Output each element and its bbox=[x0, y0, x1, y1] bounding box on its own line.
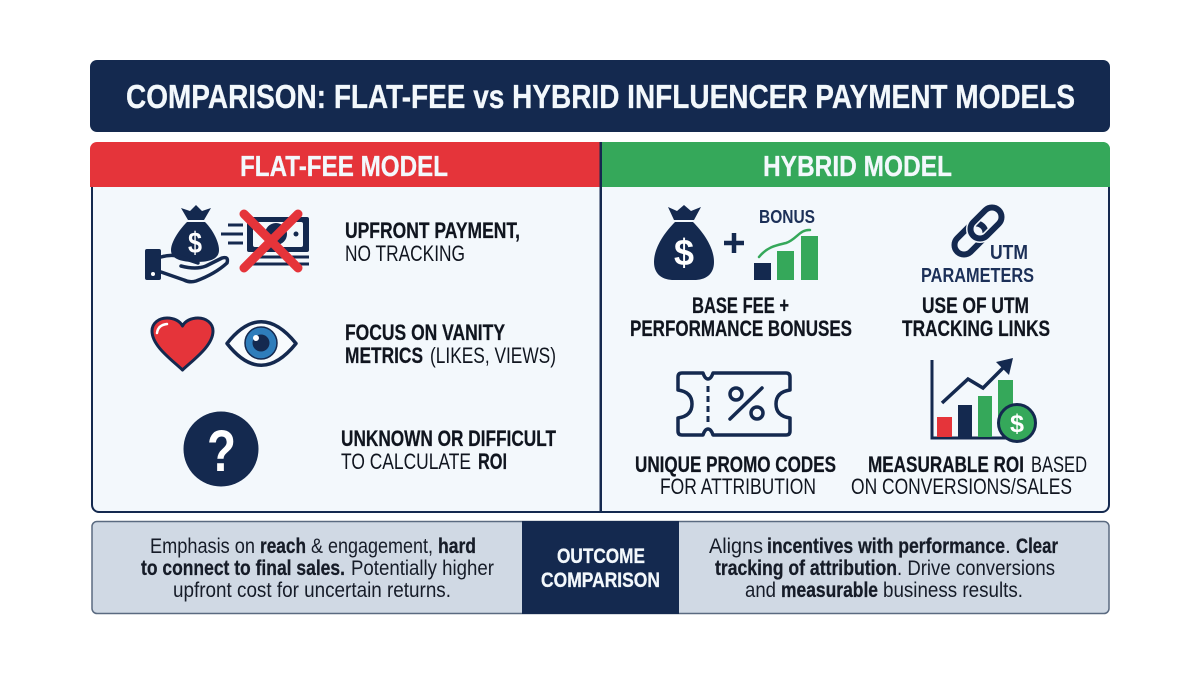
text: base fee bbox=[630, 293, 852, 341]
text: flat-fee outcome: & engagement, bbox=[311, 535, 433, 558]
icon: question mark: ? bbox=[207, 419, 236, 484]
text: hybrid outcome bbox=[709, 535, 1058, 602]
text: upfront payment: UPFRONT PAYMENT, bbox=[345, 218, 520, 243]
label: outcome comparison: COMPARISON bbox=[541, 569, 660, 592]
icon: base fee plus bonus chart: $ bbox=[674, 232, 694, 273]
text: hybrid outcome: tracking of attribution bbox=[715, 557, 897, 580]
text: hybrid outcome: measurable bbox=[781, 579, 878, 602]
text: vanity metrics: (LIKES, VIEWS) bbox=[430, 343, 556, 368]
heading: flat-fee model: FLAT-FEE MODEL bbox=[240, 151, 448, 183]
icon: money bag on hand with crossed-out banknote bbox=[145, 205, 309, 282]
text: measurable roi: MEASURABLE ROI bbox=[868, 452, 1024, 477]
text: promo codes: FOR ATTRIBUTION bbox=[660, 474, 816, 499]
label: outcome comparison: OUTCOME bbox=[557, 545, 645, 568]
icon: roi chart with coin bbox=[932, 358, 1036, 442]
text: unknown roi: ROI bbox=[478, 449, 507, 474]
text: hybrid outcome: business results. bbox=[883, 579, 1023, 602]
icon: promo ticket bbox=[678, 373, 790, 435]
text: flat-fee outcome: upfront cost for uncertain returns. bbox=[173, 579, 451, 602]
text: promo codes bbox=[635, 452, 836, 499]
text: measurable roi: ON CONVERSIONS/SALES bbox=[851, 474, 1072, 499]
text: flat-fee outcome: reach bbox=[260, 535, 306, 558]
text: flat-fee outcome: Potentially higher bbox=[351, 557, 494, 580]
panel: comparison table bbox=[90, 142, 1110, 512]
heading: hybrid model: HYBRID MODEL bbox=[763, 151, 952, 183]
icon: chain link with utm parameters bbox=[921, 204, 1034, 287]
text: base fee: PERFORMANCE BONUSES bbox=[630, 316, 852, 341]
text: hybrid outcome: and bbox=[745, 579, 776, 602]
text: measurable roi bbox=[851, 452, 1087, 499]
text: unknown roi: TO CALCULATE bbox=[341, 449, 471, 474]
text: measurable roi: BASED bbox=[1031, 452, 1087, 477]
title bbox=[90, 60, 1110, 132]
heading: flat-fee model bbox=[90, 142, 600, 187]
icon: roi chart with coin: $ bbox=[1010, 410, 1024, 438]
text: vanity metrics: FOCUS ON VANITY bbox=[345, 320, 505, 345]
text: flat-fee outcome bbox=[141, 535, 494, 602]
text: flat-fee outcome: Emphasis on bbox=[150, 535, 255, 558]
text: promo codes: UNIQUE PROMO CODES bbox=[635, 452, 836, 477]
icon: heart and eye bbox=[152, 318, 296, 370]
text: utm tracking: TRACKING LINKS bbox=[902, 316, 1050, 341]
heading: hybrid model bbox=[601, 142, 1110, 187]
text: flat-fee outcome: hard bbox=[438, 535, 476, 558]
text: hybrid outcome: Aligns bbox=[709, 535, 763, 558]
text: utm tracking bbox=[902, 293, 1050, 341]
icon: base fee plus bonus chart bbox=[654, 205, 818, 280]
text: base fee: BASE FEE + bbox=[692, 293, 789, 318]
panel: outcome comparison bbox=[92, 521, 1109, 614]
text: unknown roi bbox=[341, 426, 556, 474]
icon: chain link with utm parameters: UTM bbox=[990, 242, 1028, 264]
icon: money bag on hand with crossed-out banknote: $ bbox=[188, 227, 202, 260]
label: outcome comparison bbox=[522, 521, 679, 614]
text: flat-fee outcome: to connect to final sales. bbox=[141, 557, 345, 580]
column divider bbox=[600, 142, 602, 512]
icon: chain link with utm parameters: PARAMETERS bbox=[921, 265, 1034, 287]
text: unknown roi: UNKNOWN OR DIFFICULT bbox=[341, 426, 556, 451]
text: upfront payment bbox=[345, 218, 520, 266]
icon: question mark bbox=[184, 412, 258, 486]
text: hybrid outcome: . bbox=[1005, 535, 1011, 558]
text: hybrid outcome: incentives with performance bbox=[767, 535, 1005, 558]
text: vanity metrics: METRICS bbox=[345, 343, 423, 368]
text: utm tracking: USE OF UTM bbox=[922, 293, 1029, 318]
icon: base fee plus bonus chart: BONUS bbox=[759, 206, 815, 227]
text: hybrid outcome: . Drive conversions bbox=[897, 557, 1055, 580]
text: hybrid outcome: Clear bbox=[1016, 535, 1058, 558]
text: vanity metrics bbox=[345, 320, 556, 368]
text: upfront payment: NO TRACKING bbox=[345, 241, 465, 266]
